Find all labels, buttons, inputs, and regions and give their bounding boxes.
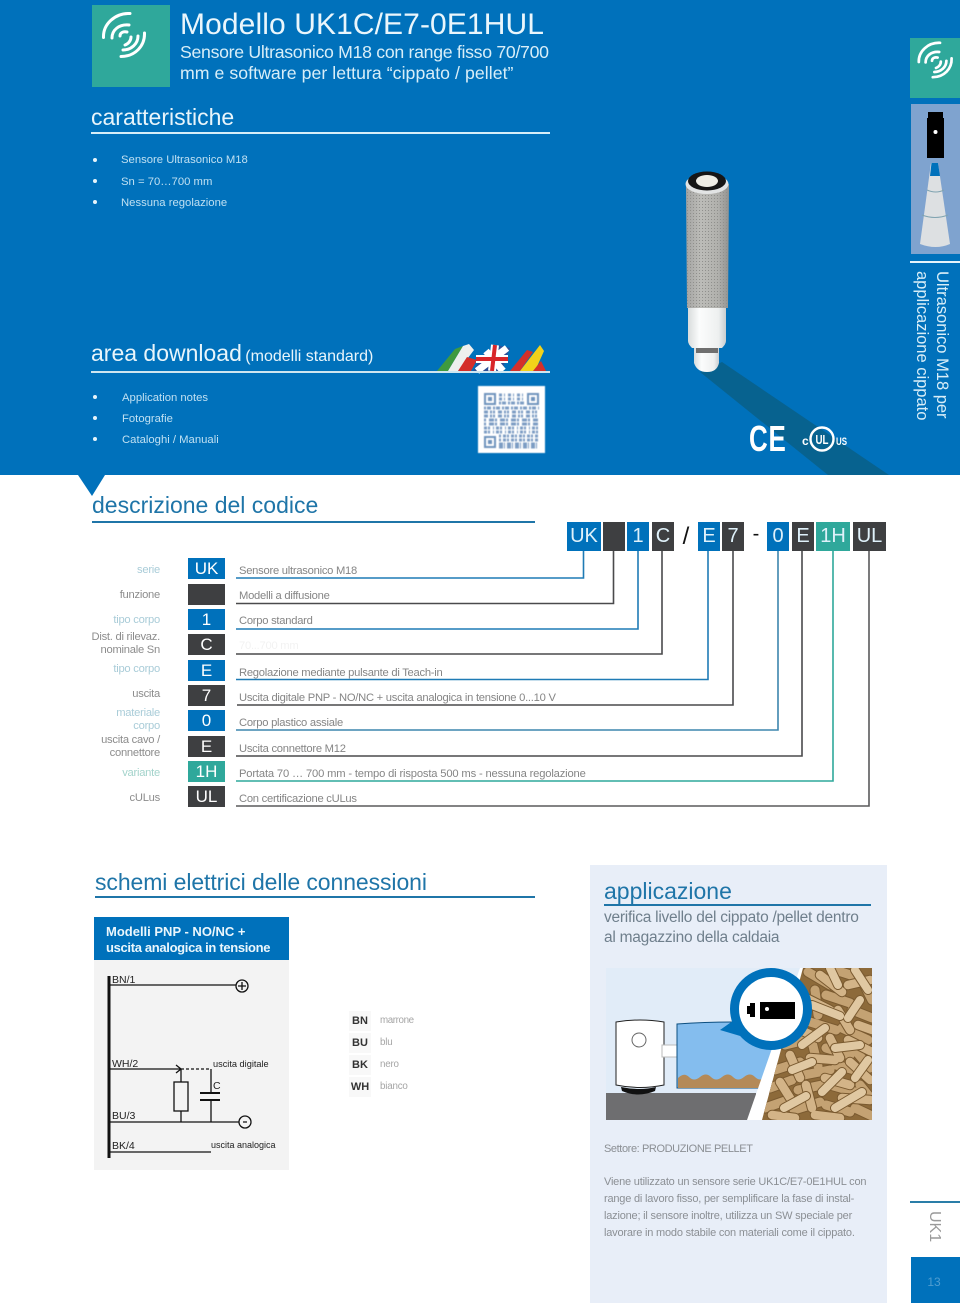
page number tab: 13 <box>927 1275 941 1289</box>
model box <box>94 917 289 960</box>
code table: 1H <box>196 762 217 781</box>
code boxes <box>567 522 886 551</box>
code boxes: UL <box>857 525 882 547</box>
wire colour legend: BU <box>352 1037 368 1049</box>
wiring diagram: C <box>213 1080 221 1092</box>
cULus mark: US <box>836 436 847 448</box>
heading: applicazione: applicazione <box>604 878 732 904</box>
code table: nominale Sn <box>101 644 160 656</box>
wiring diagram: BU/3 <box>112 1110 136 1122</box>
list: caratteristiche <box>93 154 248 209</box>
callout <box>720 1018 747 1038</box>
application description <box>604 1176 866 1239</box>
icon: language flags <box>437 344 546 374</box>
code table: tipo corpo <box>113 614 160 626</box>
application illustration <box>606 968 872 1120</box>
code boxes: C <box>656 525 670 547</box>
QR code <box>477 385 546 454</box>
wire colour legend: BK <box>352 1059 368 1071</box>
header pointer triangle <box>78 475 105 496</box>
heading: area download: area download (modelli standard) <box>91 340 373 366</box>
code table: Regolazione mediante pulsante di Teach-in <box>239 667 442 679</box>
code table: materiale <box>116 707 160 719</box>
code table: C <box>200 635 213 654</box>
cULus mark: UL <box>816 432 829 447</box>
wiring diagram: uscita digitale <box>213 1059 269 1069</box>
code table: Corpo plastico assiale <box>239 717 343 729</box>
code table: variante <box>122 767 160 779</box>
code boxes: / <box>683 523 689 550</box>
wiring diagram: WH/2 <box>112 1058 138 1070</box>
code table: uscita cavo / <box>101 734 160 746</box>
heading: caratteristiche: caratteristiche <box>91 104 234 130</box>
icon: ultrasonic waves tile <box>92 5 170 87</box>
code boxes: UK <box>570 525 598 547</box>
side tab: waves <box>910 38 960 98</box>
footer series label: UK1 <box>926 1211 943 1242</box>
wire colour legend: marrone <box>380 1015 414 1026</box>
code table: 0 <box>202 711 211 730</box>
wiring diagram: BN/1 <box>112 974 136 986</box>
application description: lavorare in modo stabile con materiali come il cippato. <box>604 1227 855 1239</box>
code table: serie <box>137 564 160 576</box>
wiring diagram <box>94 960 289 1170</box>
code table: uscita <box>132 688 160 700</box>
boiler <box>616 1020 664 1088</box>
footer tab rule <box>910 1201 960 1203</box>
code table: corpo <box>133 720 160 732</box>
code table: Uscita digitale PNP - NO/NC + uscita analogica in tensione 0...10 V <box>239 692 556 704</box>
sensor shadow <box>700 362 889 475</box>
cULus mark: c <box>802 434 809 448</box>
code table: E <box>201 737 212 756</box>
wire colour legend: BN <box>352 1015 368 1027</box>
side title: Ultrasonico M18 per <box>933 271 952 419</box>
model box: Modelli PNP - NO/NC + <box>106 924 246 939</box>
code boxes: 1H <box>820 525 846 547</box>
panel: blue header <box>0 0 960 475</box>
code table: E <box>201 661 212 680</box>
code boxes: E <box>702 525 716 547</box>
list: download: Fotografie <box>122 413 173 425</box>
sensor photo <box>686 172 729 372</box>
code table: tipo corpo <box>113 663 160 675</box>
wire colour legend: nero <box>380 1059 399 1070</box>
code table: Corpo standard <box>239 615 313 627</box>
CE mark: CE <box>749 418 786 459</box>
side title: applicazione cippato <box>913 271 932 420</box>
code table: Con certificazione cULus <box>239 793 357 805</box>
wire colour legend: WH <box>351 1081 369 1093</box>
subtitle: mm e software per lettura “cippato / pellet” <box>180 63 514 83</box>
title: Modello UK1C/E7-0E1HUL <box>180 8 544 41</box>
list: download: Application notes <box>122 392 208 404</box>
code table: Uscita connettore M12 <box>239 743 346 755</box>
side title <box>913 271 952 420</box>
code boxes: E <box>796 525 810 547</box>
application description: range di lavoro fisso, per semplificare la fase di instal- <box>604 1193 854 1205</box>
application subtitle <box>604 909 859 946</box>
code boxes: 1 <box>632 525 644 547</box>
list: caratteristiche: Nessuna regolazione <box>121 197 227 209</box>
wiring diagram: uscita analogica <box>211 1140 276 1150</box>
wire colour legend: blu <box>380 1037 392 1048</box>
code boxes: 0 <box>772 525 784 547</box>
code table: connettore <box>110 747 160 759</box>
sector text: Settore: PRODUZIONE PELLET <box>604 1143 753 1155</box>
code table <box>92 558 586 807</box>
application description: Viene utilizzato un sensore serie UK1C/E7-0E1HUL con <box>604 1176 866 1188</box>
cULus mark <box>802 426 847 452</box>
code table: UK <box>195 559 218 578</box>
code table: Dist. di rilevaz. <box>92 631 160 643</box>
model box: uscita analogica in tensione <box>106 940 270 955</box>
code table: cULus <box>130 792 160 804</box>
list: download <box>93 392 219 446</box>
page number tab <box>911 1257 957 1303</box>
application subtitle: al magazzino della caldaia <box>604 929 779 946</box>
subtitle: Sensore Ultrasonico M18 con range fisso 70/700 <box>180 42 549 62</box>
list: download: Cataloghi / Manuali <box>122 434 219 446</box>
code boxes: 7 <box>727 525 739 547</box>
wire colour legend: bianco <box>380 1081 408 1092</box>
code table: 7 <box>202 686 211 705</box>
code table: 70...700 mm <box>239 640 298 652</box>
panel: applicazione <box>590 865 887 1303</box>
code connector lines <box>236 551 870 807</box>
heading: descrizione del codice: descrizione del codice <box>92 492 318 518</box>
list: caratteristiche: Sn = 70…700 mm <box>121 176 212 188</box>
code boxes: - <box>753 523 759 545</box>
heading: schemi elettrici: schemi elettrici delle connessioni <box>95 869 427 895</box>
code table: Portata 70 … 700 mm - tempo di risposta 500 ms - nessuna regolazione <box>239 768 586 780</box>
tank <box>677 1022 790 1088</box>
code table: Sensore ultrasonico M18 <box>239 565 357 577</box>
code table: 1 <box>202 610 211 629</box>
application subtitle: verifica livello del cippato /pellet dentro <box>604 909 859 926</box>
wire colour legend <box>350 1015 414 1093</box>
subtitle <box>180 42 549 83</box>
wiring diagram: BK/4 <box>112 1140 135 1152</box>
code table: UL <box>196 787 217 806</box>
pellets <box>747 968 872 1120</box>
code table: Modelli a diffusione <box>239 590 330 602</box>
side tab: sensor beam diagram <box>911 104 960 254</box>
list: caratteristiche: Sensore Ultrasonico M18 <box>121 154 248 166</box>
code table: funzione <box>120 589 160 601</box>
application description: lazione; il sensore inoltre, utilizza un SW speciale per <box>604 1210 852 1222</box>
